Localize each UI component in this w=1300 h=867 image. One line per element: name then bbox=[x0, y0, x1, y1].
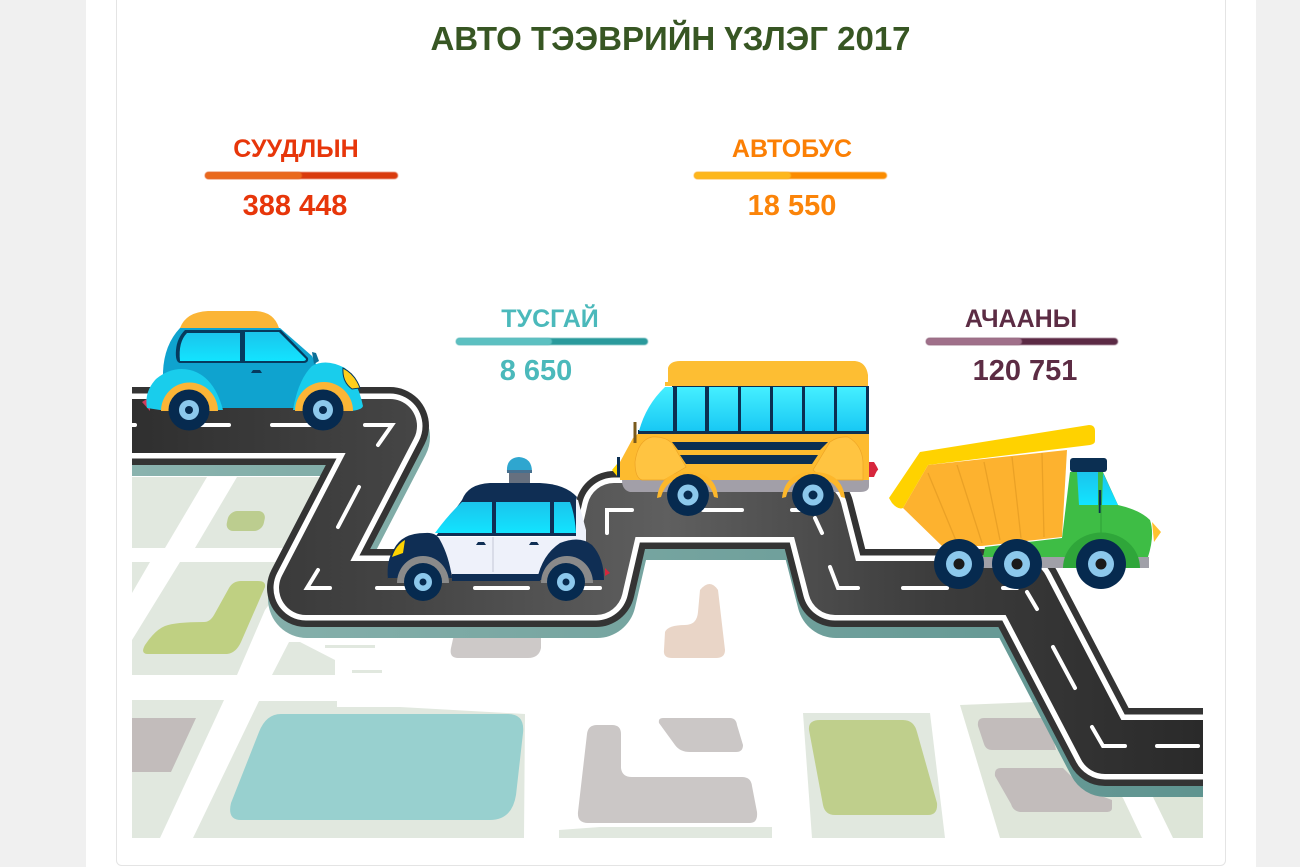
stat: АВТОБУС: АВТОБУС bbox=[732, 135, 852, 163]
icon: yellow bus bbox=[612, 361, 878, 516]
icon: special police car bbox=[388, 457, 610, 601]
stat: АЧААНЫ: 120 751 bbox=[973, 355, 1077, 387]
road center markings bbox=[132, 425, 1198, 746]
title: АВТО ТЭЭВРИЙН ҮЗЛЭГ 2017 bbox=[430, 19, 911, 57]
icon: blue car bbox=[142, 311, 363, 430]
stat: АЧААНЫ bbox=[926, 305, 1118, 387]
stat: СУУДЛЫН bbox=[205, 135, 398, 222]
stat: АВТОБУС: 18 550 bbox=[748, 190, 836, 222]
icon: dump truck bbox=[889, 425, 1161, 589]
stat: СУУДЛЫН: 388 448 bbox=[243, 190, 347, 222]
stat: АЧААНЫ: АЧААНЫ bbox=[965, 305, 1077, 333]
city map background bbox=[132, 477, 1203, 838]
stat: ТУСГАЙ: ТУСГАЙ bbox=[501, 303, 599, 333]
stat: ТУСГАЙ: 8 650 bbox=[500, 355, 572, 387]
stat: ТУСГАЙ bbox=[456, 303, 648, 387]
stat: АВТОБУС bbox=[694, 135, 887, 222]
stat: СУУДЛЫН: СУУДЛЫН bbox=[233, 135, 359, 163]
winding road bbox=[120, 425, 1216, 758]
